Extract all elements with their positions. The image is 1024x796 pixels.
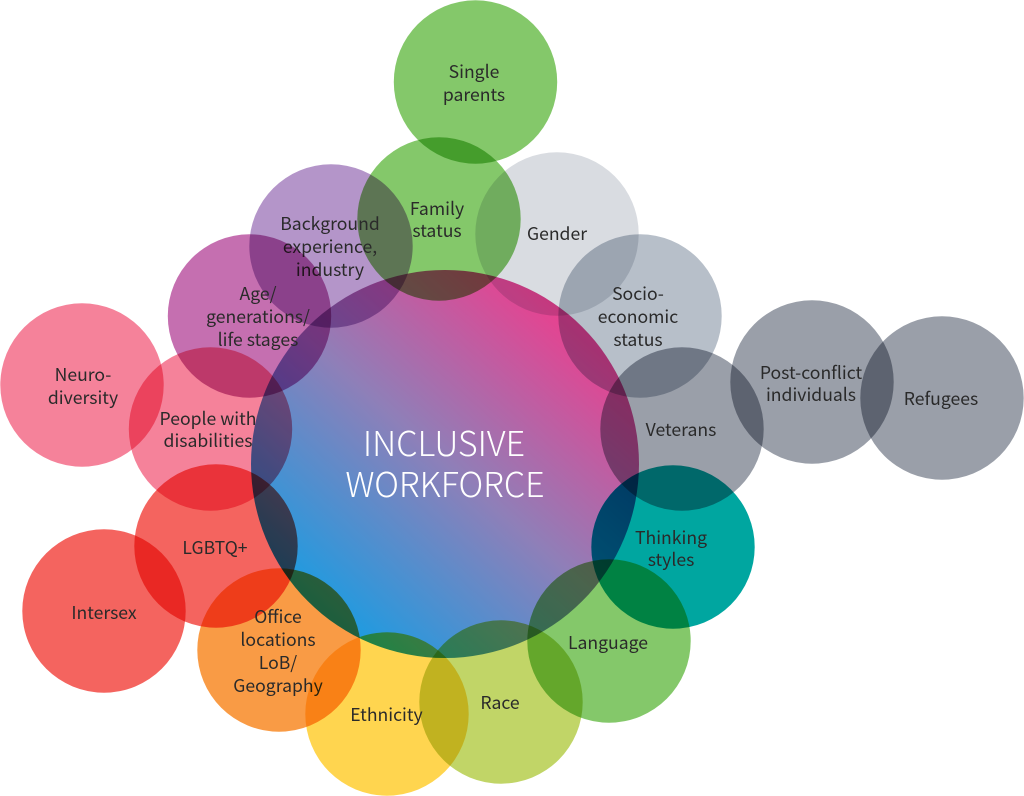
circle: family status: status [412, 218, 462, 243]
circle: intersex: Intersex [71, 600, 137, 625]
circle: family status: Family [410, 196, 464, 221]
center title: INCLUSIVE [363, 417, 525, 466]
circle: office locations: Office [254, 604, 302, 629]
circle: gender: Gender [527, 221, 587, 246]
circle: post-conflict individuals: individuals [766, 382, 856, 407]
circle: age [168, 234, 331, 398]
circle: gender [475, 152, 639, 316]
circle: LGBTQ+: LGBTQ+ [182, 535, 248, 560]
circle: people with disabilities: disabilities [164, 428, 252, 453]
circle: socio-economic status: economic [598, 304, 678, 329]
circle: age: generations/ [206, 304, 310, 329]
circle: race [419, 620, 583, 784]
circle: refugees: Refugees [904, 386, 978, 411]
circle: thinking styles: Thinking [635, 525, 707, 550]
circle: background: experience, [283, 234, 377, 259]
circle: office locations: LoB/ [259, 650, 297, 675]
circle: language: Language [568, 630, 648, 655]
circle: veterans [600, 347, 764, 511]
circle: socio-economic status [558, 234, 722, 398]
circle: single parents: Single [449, 59, 499, 84]
circle: age: Age/ [240, 281, 277, 306]
circle: thinking styles: styles [648, 547, 694, 572]
circle: race: Race [480, 690, 520, 715]
circle: people with disabilities [129, 347, 292, 511]
circle: language [527, 559, 691, 723]
circle: socio-economic status: status [613, 327, 663, 352]
circle: neurodiversity: diversity [48, 385, 118, 410]
circle: refugees [860, 316, 1024, 480]
center circle [251, 270, 639, 658]
circle: veterans: Veterans [646, 417, 716, 442]
circle: office locations: Geography [233, 673, 323, 698]
circle: neurodiversity: Neuro- [55, 362, 111, 387]
circle: background: industry [296, 257, 364, 282]
center title [345, 417, 545, 507]
circle: LGBTQ+ [134, 464, 298, 628]
center title: WORKFORCE [345, 458, 545, 507]
circle: intersex [22, 529, 186, 693]
circle: post-conflict individuals: Post-conflict [760, 360, 863, 385]
circle: single parents: parents [443, 82, 505, 107]
circle: thinking styles [591, 465, 755, 629]
circle: post-conflict individuals [730, 300, 894, 464]
circle: background: Background [280, 211, 380, 236]
circle: office locations: locations [240, 627, 316, 652]
circle: office locations [197, 568, 361, 732]
circle: ethnicity: Ethnicity [350, 702, 423, 727]
circle: background [249, 164, 413, 328]
circle: single parents [394, 0, 557, 164]
circle: neurodiversity [0, 303, 164, 467]
circle: ethnicity [305, 632, 469, 796]
circle: people with disabilities: People with [160, 406, 256, 431]
circle: socio-economic status: Socio- [612, 281, 664, 306]
circle: family status [357, 137, 521, 301]
circle: age: life stages [218, 327, 298, 352]
